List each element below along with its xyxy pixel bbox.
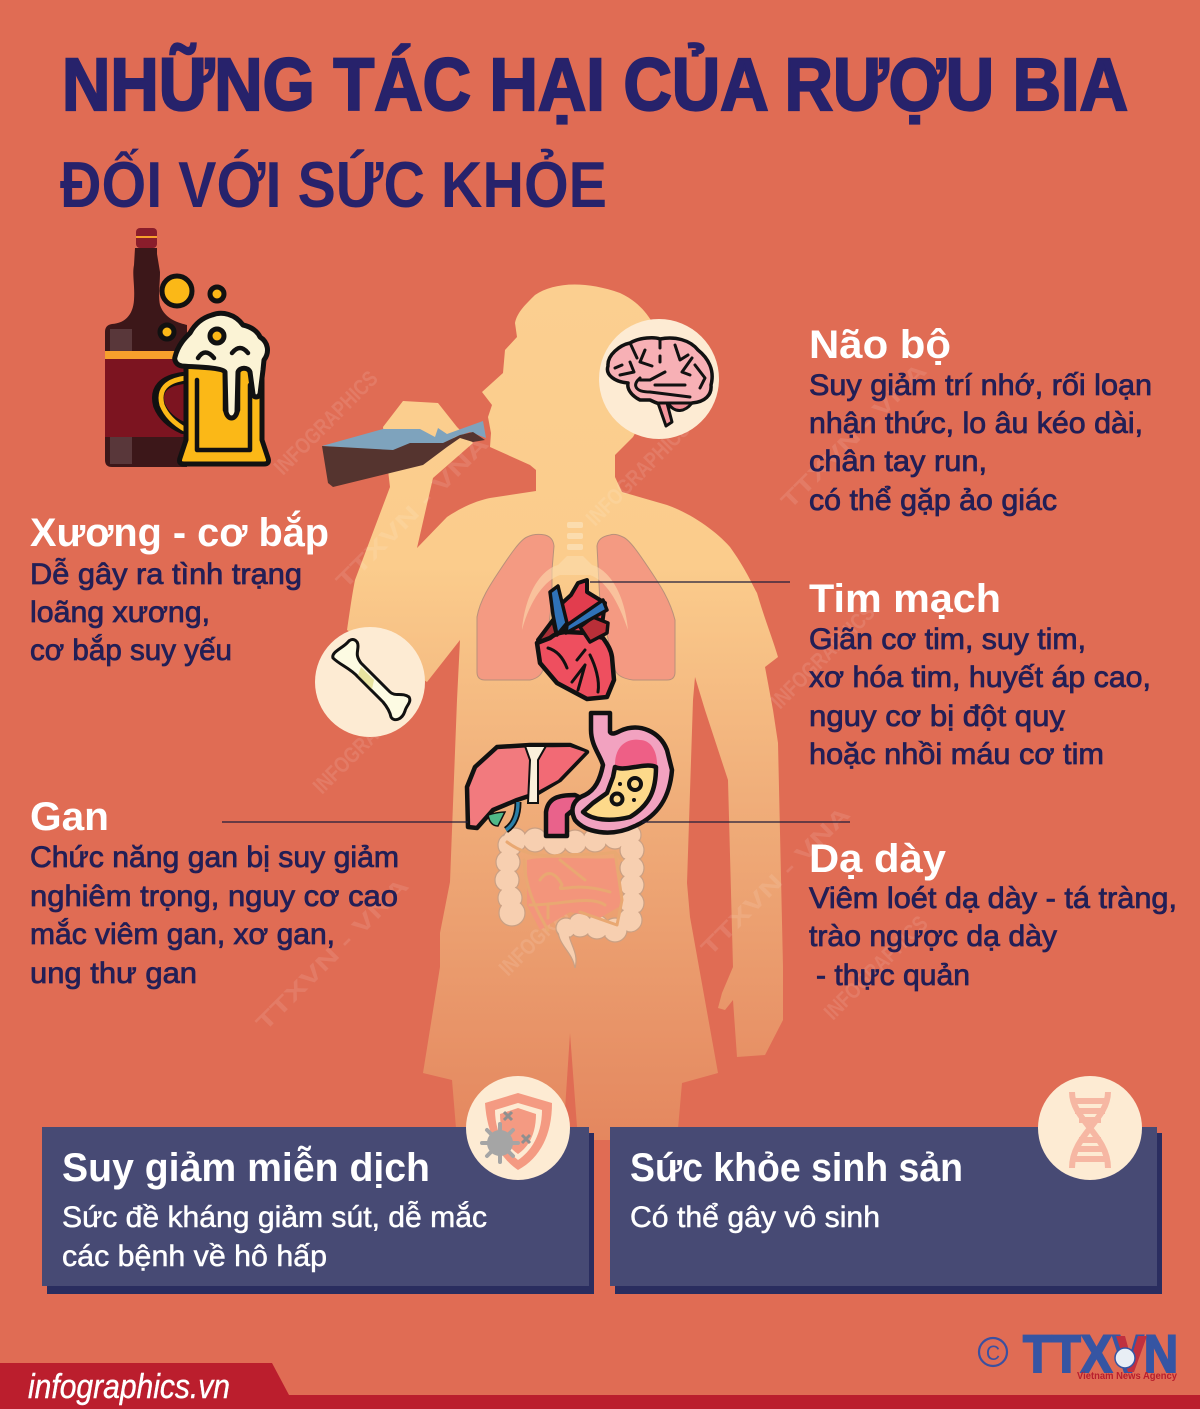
text block: brain: có thể gặp ảo giác	[809, 484, 1057, 517]
icon: DNA	[1038, 1076, 1142, 1180]
text block: brain: nhận thức, lo âu kéo dài,	[809, 407, 1143, 440]
icon: shield and virus	[466, 1076, 570, 1180]
title	[60, 43, 1128, 221]
watermarks: TTXVN - VNA	[331, 431, 494, 594]
text block: heart	[809, 577, 1151, 771]
watermarks: TTXVN - VNA	[251, 873, 414, 1036]
text block: liver: Gan	[30, 795, 109, 839]
text block: bones and muscles: Dễ gây ra tình trạng	[30, 558, 302, 591]
organ: lungs	[477, 534, 675, 680]
organ: liver	[467, 745, 587, 830]
text block: heart: Tim mạch	[809, 577, 1001, 621]
title: ĐỐI VỚI SỨC KHỎE	[60, 148, 607, 221]
watermarks: TTXVN - VNA	[776, 358, 932, 514]
watermarks: INFOGRAPHICS	[308, 685, 422, 799]
organ: trachea	[522, 522, 628, 630]
text block: liver: Chức năng gan bị suy giảm	[30, 841, 399, 874]
text: immune	[62, 1201, 487, 1273]
watermarks: TTXVN - VNA	[696, 801, 855, 961]
icon: drinking bottle	[322, 421, 486, 487]
text block: liver: mắc viêm gan, xơ gan,	[30, 918, 335, 951]
text block: stomach: trào ngược dạ dày	[809, 920, 1057, 953]
text: immune: các bệnh về hô hấp	[62, 1240, 327, 1273]
leader lines	[222, 582, 850, 822]
footer site name: infographics.vn	[28, 1368, 230, 1406]
text block: bones and muscles	[30, 509, 329, 667]
text block: brain: Suy giảm trí nhớ, rối loạn	[809, 369, 1152, 402]
icon: bone	[315, 627, 425, 737]
heading: immune: Suy giảm miễn dịch	[62, 1144, 430, 1190]
logo: TTXVN: C	[986, 1342, 1000, 1365]
text block: stomach: Viêm loét dạ dày - tá tràng,	[809, 882, 1177, 915]
text block: brain	[809, 323, 1152, 517]
organ: heart	[537, 580, 614, 699]
panel: immune system	[42, 1076, 594, 1294]
organ: stomach	[546, 713, 672, 836]
text block: bones and muscles: loãng xương,	[30, 596, 210, 629]
icon: brain	[599, 319, 719, 439]
text block: stomach: - thực quản	[816, 959, 970, 992]
text block: heart: hoặc nhồi máu cơ tim	[809, 738, 1104, 771]
human silhouette	[347, 285, 783, 1140]
text: reproductive: Có thể gây vô sinh	[630, 1201, 880, 1234]
text: immune: Sức đề kháng giảm sút, dễ mắc	[62, 1201, 487, 1234]
text block: heart: Giãn cơ tim, suy tim,	[809, 623, 1086, 656]
text block: heart: xơ hóa tim, huyết áp cao,	[809, 661, 1151, 694]
text block: stomach: Dạ dày	[809, 837, 947, 881]
text block: stomach	[809, 837, 1177, 992]
text block: liver	[30, 795, 399, 990]
text block: liver: nghiêm trọng, nguy cơ cao	[30, 880, 398, 913]
watermarks	[251, 358, 933, 1036]
logo: TTXVN: Vietnam News Agency	[1077, 1371, 1177, 1382]
watermarks: INFOGRAPHICS	[269, 366, 383, 480]
text block: liver: ung thư gan	[30, 957, 197, 990]
text block: brain: Não bộ	[809, 323, 951, 367]
organ: intestines	[495, 824, 644, 968]
watermarks: INFOGRAPHICS	[819, 911, 933, 1025]
watermarks: INFOGRAPHICS	[494, 867, 608, 981]
icon: liquor bottle and beer mug	[105, 228, 268, 467]
text block: brain: chân tay run,	[809, 445, 987, 478]
text block: bones and muscles: cơ bắp suy yếu	[30, 634, 232, 667]
text block: bones and muscles: Xương - cơ bắp	[30, 509, 329, 555]
text block: heart: nguy cơ bị đột quỵ	[809, 700, 1065, 733]
footer band	[0, 1363, 1200, 1409]
panel: reproductive health	[610, 1076, 1162, 1294]
watermarks: INFOGRAPHICS	[581, 417, 695, 531]
heading: reproductive: Sức khỏe sinh sản	[630, 1146, 963, 1190]
logo: TTXVN: TTXVN	[1023, 1325, 1178, 1384]
watermarks: INFOGRAPHICS	[766, 600, 880, 714]
